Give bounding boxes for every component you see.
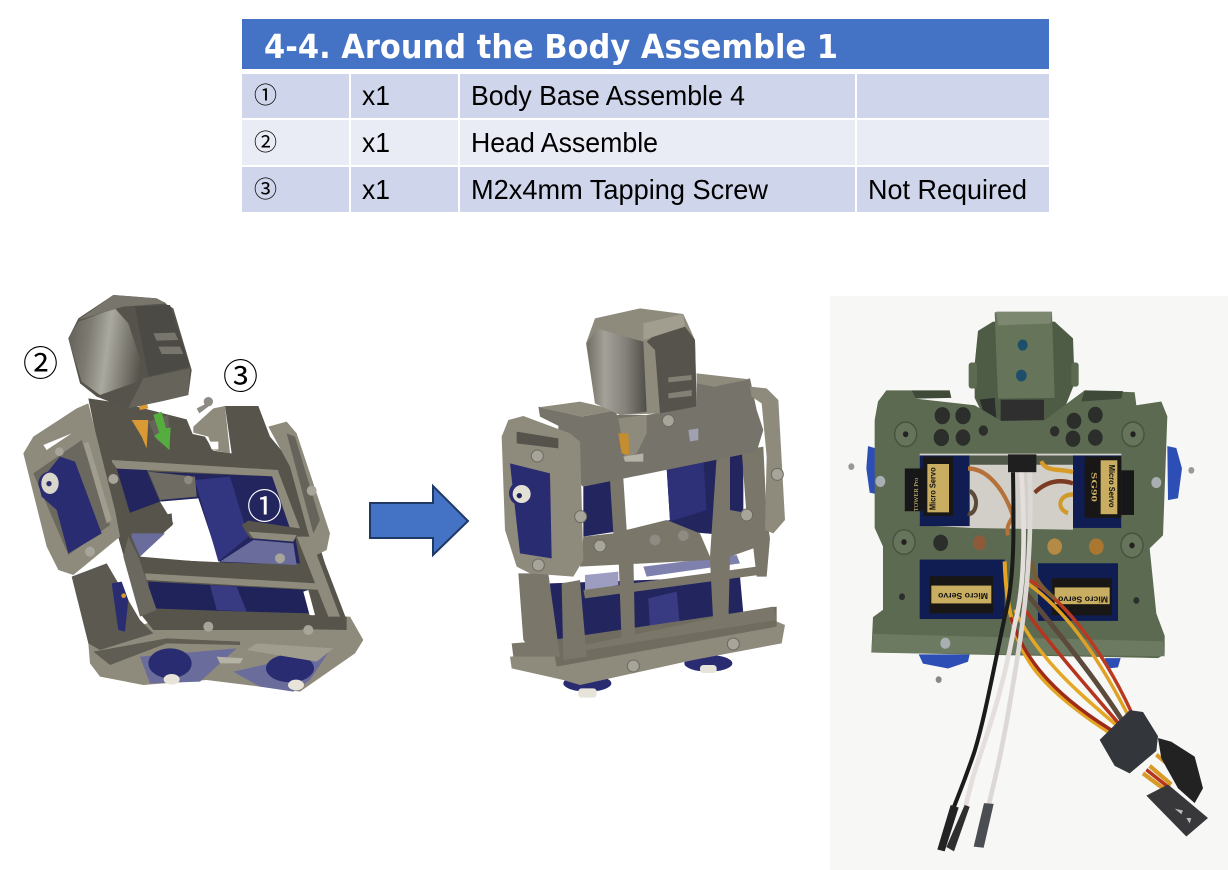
top servo window bbox=[905, 454, 1134, 530]
servo cable bundle bbox=[1005, 561, 1136, 740]
side tabs and screws bbox=[848, 463, 1194, 683]
photo: printed robot body bbox=[830, 296, 1228, 870]
illustration: assembled CAD model bbox=[502, 308, 785, 698]
top servo window: Micro Servo bbox=[1107, 465, 1117, 508]
frame bars bbox=[112, 460, 347, 630]
table row 2: Head Assemble bbox=[471, 127, 658, 158]
top frame bbox=[538, 373, 763, 487]
screw 3 bbox=[197, 397, 213, 413]
top servo window: SG90 bbox=[1089, 472, 1099, 502]
table row 3 bbox=[242, 167, 1049, 212]
jumper plugs bbox=[937, 803, 994, 851]
label 1: ① bbox=[247, 479, 282, 530]
base plate bbox=[510, 607, 785, 685]
connector: header at top bbox=[1008, 454, 1036, 472]
illustration: exploded CAD assembly bbox=[23, 295, 363, 692]
head bbox=[586, 308, 697, 415]
bottom servo window: Micro Servo bbox=[1058, 595, 1108, 604]
bottom servo window: Micro Servo bbox=[938, 591, 988, 600]
left square servo frame bbox=[23, 403, 120, 575]
table row 1 bbox=[242, 74, 1049, 118]
top servo window: TOWER Pro bbox=[912, 477, 920, 511]
bottom feet bbox=[563, 655, 732, 698]
arrow: assembled result bbox=[370, 486, 468, 555]
servos behind frame bbox=[550, 453, 757, 647]
velcro band bbox=[1100, 710, 1158, 773]
table row 2: x1 bbox=[362, 127, 390, 158]
table row 2: ② bbox=[254, 123, 277, 157]
servo blue body and window bbox=[115, 468, 315, 617]
screw posts bbox=[893, 422, 1144, 558]
table row 1: ① bbox=[254, 76, 277, 110]
top servo window: Micro Servo bbox=[928, 467, 937, 510]
black and white jumper wires bbox=[954, 472, 1030, 807]
right side strip and screws bbox=[184, 422, 330, 635]
screws bbox=[531, 415, 783, 672]
label 2: ② bbox=[23, 336, 58, 387]
bottom servo window bbox=[920, 560, 1118, 621]
upper cable loops bbox=[968, 461, 1073, 535]
head bbox=[969, 312, 1079, 424]
photo background bbox=[830, 296, 1228, 870]
table row 3: x1 bbox=[362, 174, 390, 205]
lower left frame bbox=[72, 563, 153, 650]
servo horns blue bbox=[866, 446, 1182, 668]
table row 3: ③ bbox=[254, 170, 277, 204]
table row 3: M2x4mm Tapping Screw bbox=[471, 174, 769, 205]
table header: title bbox=[242, 19, 1049, 69]
wire ends and connector bbox=[1143, 738, 1208, 837]
table row 1: x1 bbox=[362, 80, 390, 111]
right side frame bbox=[750, 387, 785, 533]
table: parts list bbox=[242, 19, 1049, 212]
table row 2 bbox=[242, 120, 1049, 165]
table header: title: 4-4. Around the Body Assemble 1 bbox=[264, 27, 838, 66]
head assembly bbox=[68, 295, 192, 408]
left side frame bbox=[502, 416, 583, 577]
green body bbox=[871, 390, 1167, 658]
bottom plate with servos bbox=[88, 617, 363, 692]
green arrow bbox=[153, 412, 171, 450]
label 3: ③ bbox=[223, 349, 258, 400]
uprights and frame bbox=[518, 447, 777, 660]
main frame dark body bbox=[88, 398, 347, 630]
body holes bbox=[899, 407, 1139, 604]
table row 3: Not Required bbox=[868, 174, 1027, 205]
table row 1: Body Base Assemble 4 bbox=[471, 80, 745, 111]
